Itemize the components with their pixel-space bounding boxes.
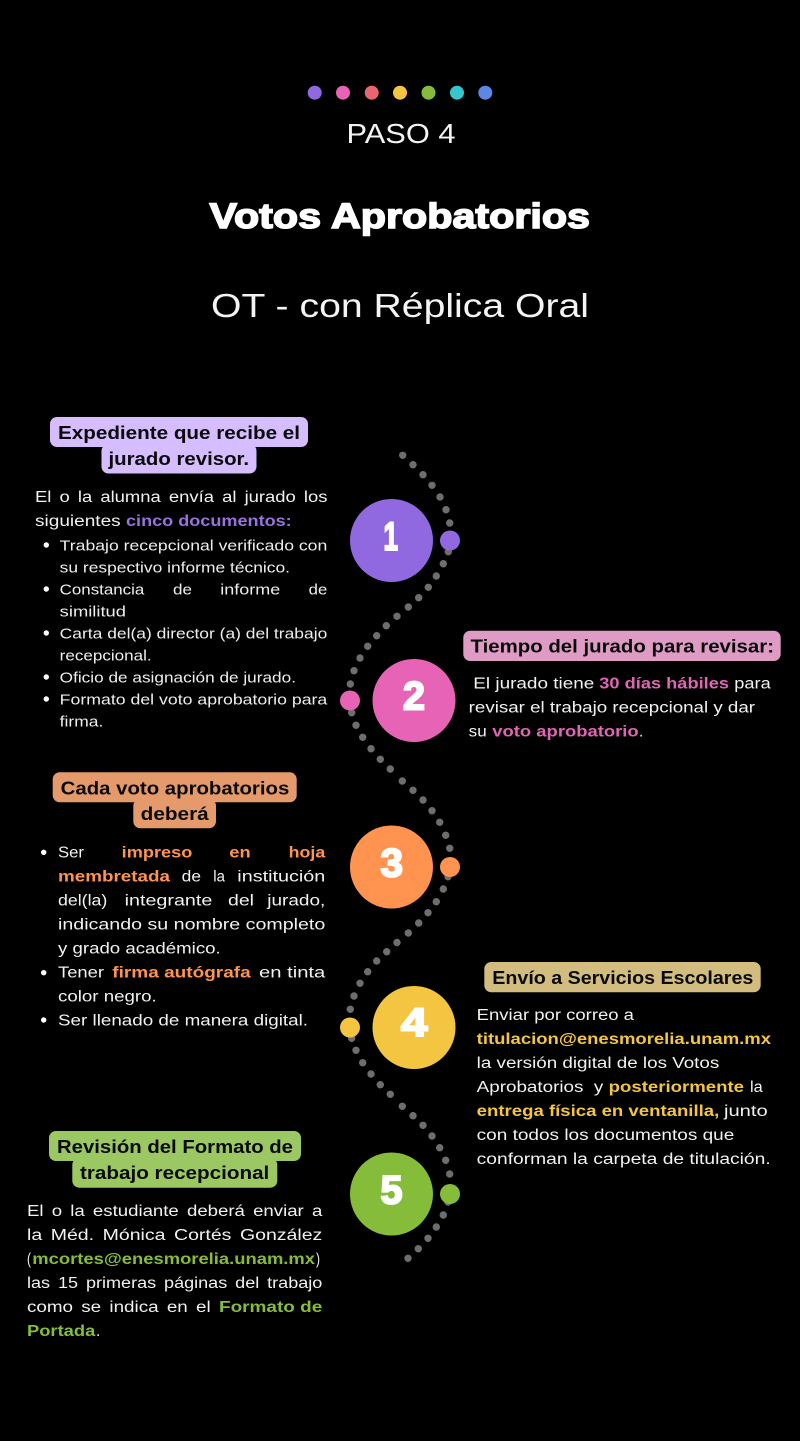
paragraph: tiempo: voto aprobatorio <box>492 723 639 740</box>
intro paragraph: siguientes <box>35 513 121 530</box>
document list: su respectivo informe técnico. <box>60 560 290 576</box>
document list: Carta del(a) director (a) del trabajo <box>60 626 327 642</box>
requirements list: en <box>229 844 251 861</box>
requirements list: en tinta <box>259 964 326 981</box>
document list: Formato del voto aprobatorio para <box>60 692 328 708</box>
header <box>210 86 590 324</box>
paragraph: envio: posteriormente <box>609 1079 745 1096</box>
panel: cada voto <box>41 772 326 1029</box>
requirements list <box>41 844 326 1029</box>
paragraph: tiempo: para <box>734 675 771 692</box>
step 2 marker <box>340 659 456 742</box>
requirements list: integrante <box>125 892 212 909</box>
paragraph: envio: la versión digital de los Votos <box>477 1055 720 1072</box>
document list: recepcional. <box>60 648 152 664</box>
document list: de <box>309 582 327 598</box>
paragraph: envio: junto <box>723 1103 768 1120</box>
document list: firma. <box>60 714 103 730</box>
step 5 marker: 5 <box>380 1168 402 1212</box>
paragraph: envio: con todos los documentos que <box>477 1127 734 1144</box>
heading: revision <box>49 1131 301 1188</box>
requirements list: de <box>182 868 201 885</box>
step 4 marker <box>340 986 456 1069</box>
step 3 marker <box>350 826 460 908</box>
paragraph: revision <box>27 1203 323 1340</box>
heading: cada voto <box>53 772 297 828</box>
paragraph: revision: Formato de <box>219 1299 323 1316</box>
requirements list: y grado académico. <box>58 940 221 957</box>
heading: cada voto: Cada voto aprobatorios <box>61 777 289 798</box>
paragraph: revision: las 15 primeras páginas del trabajo <box>27 1275 322 1292</box>
paragraph: tiempo: . <box>639 723 643 740</box>
step label: PASO 4 <box>346 118 456 149</box>
paragraph: tiempo: 30 días hábiles <box>599 675 729 692</box>
intro paragraph: El o la alumna envía al jurado los <box>35 489 328 506</box>
requirements list: del(la) <box>58 892 107 909</box>
requirements list: institución <box>237 868 325 885</box>
paragraph: revision: Portada <box>27 1323 96 1340</box>
step 4 marker: 4 <box>401 1001 428 1045</box>
document list: informe <box>220 582 280 598</box>
heading: expediente: jurado revisor. <box>107 448 249 469</box>
paragraph: revision: ) <box>316 1251 320 1268</box>
paragraph: envio: entrega física en ventanilla, <box>477 1103 719 1120</box>
requirements list: impreso <box>122 844 192 861</box>
dotted path <box>347 452 453 1262</box>
requirements list: color negro. <box>58 988 157 1005</box>
paragraph: revision: El o la estudiante deberá enviar a <box>27 1203 323 1220</box>
paragraph: envio: conforman la carpeta de titulación. <box>477 1151 771 1168</box>
document list <box>44 538 328 730</box>
document list: Oficio de asignación de jurado. <box>60 670 296 686</box>
step 1 marker: 1 <box>384 515 398 559</box>
heading: envio: Envío a Servicios Escolares <box>492 967 753 988</box>
requirements list: Ser llenado de manera digital. <box>58 1012 308 1029</box>
document list: similitud <box>60 604 126 620</box>
panel: revision del formato <box>27 1131 323 1340</box>
heading: expediente <box>50 417 308 474</box>
subtitle: OT - con Réplica Oral <box>211 287 589 324</box>
heading: tiempo: Tiempo del jurado para revisar: <box>470 636 774 657</box>
paragraph: revision: ( <box>27 1251 32 1268</box>
heading: tiempo <box>463 631 781 661</box>
colored dots row <box>308 86 492 100</box>
panel: expediente <box>35 417 328 730</box>
intro paragraph: cinco documentos: <box>126 513 292 530</box>
step 1 marker <box>350 499 460 582</box>
requirements list: Tener <box>58 964 104 981</box>
step 5 marker <box>350 1152 460 1236</box>
heading: revision: trabajo recepcional <box>80 1162 269 1183</box>
step 3 marker: 3 <box>380 842 403 886</box>
requirements list: jurado, <box>266 892 325 909</box>
paragraph: revision: como se indica en el <box>27 1299 211 1316</box>
heading: envio <box>484 962 761 992</box>
panel: envio a servicios escolares <box>477 962 772 1168</box>
paragraph: revision: . <box>96 1323 100 1340</box>
heading: expediente: Expediente que recibe el <box>58 422 300 443</box>
paragraph: envio <box>477 1007 772 1168</box>
paragraph: tiempo: El jurado tiene <box>473 675 594 692</box>
requirements list: Ser <box>58 844 84 861</box>
title: Votos Aprobatorios <box>210 197 590 236</box>
document list: de <box>173 582 192 598</box>
paragraph: tiempo: su <box>469 723 487 740</box>
paragraph: envio: Aprobatorios y <box>477 1079 604 1096</box>
paragraph: revision: mcortes@enesmorelia.unam.mx <box>32 1251 316 1268</box>
requirements list: del <box>228 892 254 909</box>
heading: cada voto: deberá <box>141 803 209 824</box>
paragraph: tiempo <box>469 675 771 740</box>
paragraph: revision: la Méd. Mónica Cortés González <box>27 1227 322 1244</box>
heading: revision: Revisión del Formato de <box>57 1136 293 1157</box>
paragraph: envio: Enviar por correo a <box>477 1007 635 1024</box>
step 2 marker: 2 <box>403 674 425 718</box>
requirements list: indicando su nombre completo <box>58 916 325 933</box>
paragraph: envio: la <box>750 1079 763 1096</box>
intro paragraph <box>35 489 328 530</box>
requirements list: la <box>213 868 225 885</box>
paragraph: tiempo: revisar el trabajo recepcional y dar <box>469 699 755 716</box>
panel: tiempo del jurado <box>463 631 781 740</box>
requirements list: hoja <box>289 844 326 861</box>
document list: Constancia <box>60 582 145 598</box>
paragraph: envio: titulacion@enesmorelia.unam.mx <box>477 1031 772 1048</box>
requirements list: membretada <box>58 868 171 885</box>
requirements list: firma autógrafa <box>112 964 251 981</box>
document list: Trabajo recepcional verificado con <box>60 538 327 554</box>
